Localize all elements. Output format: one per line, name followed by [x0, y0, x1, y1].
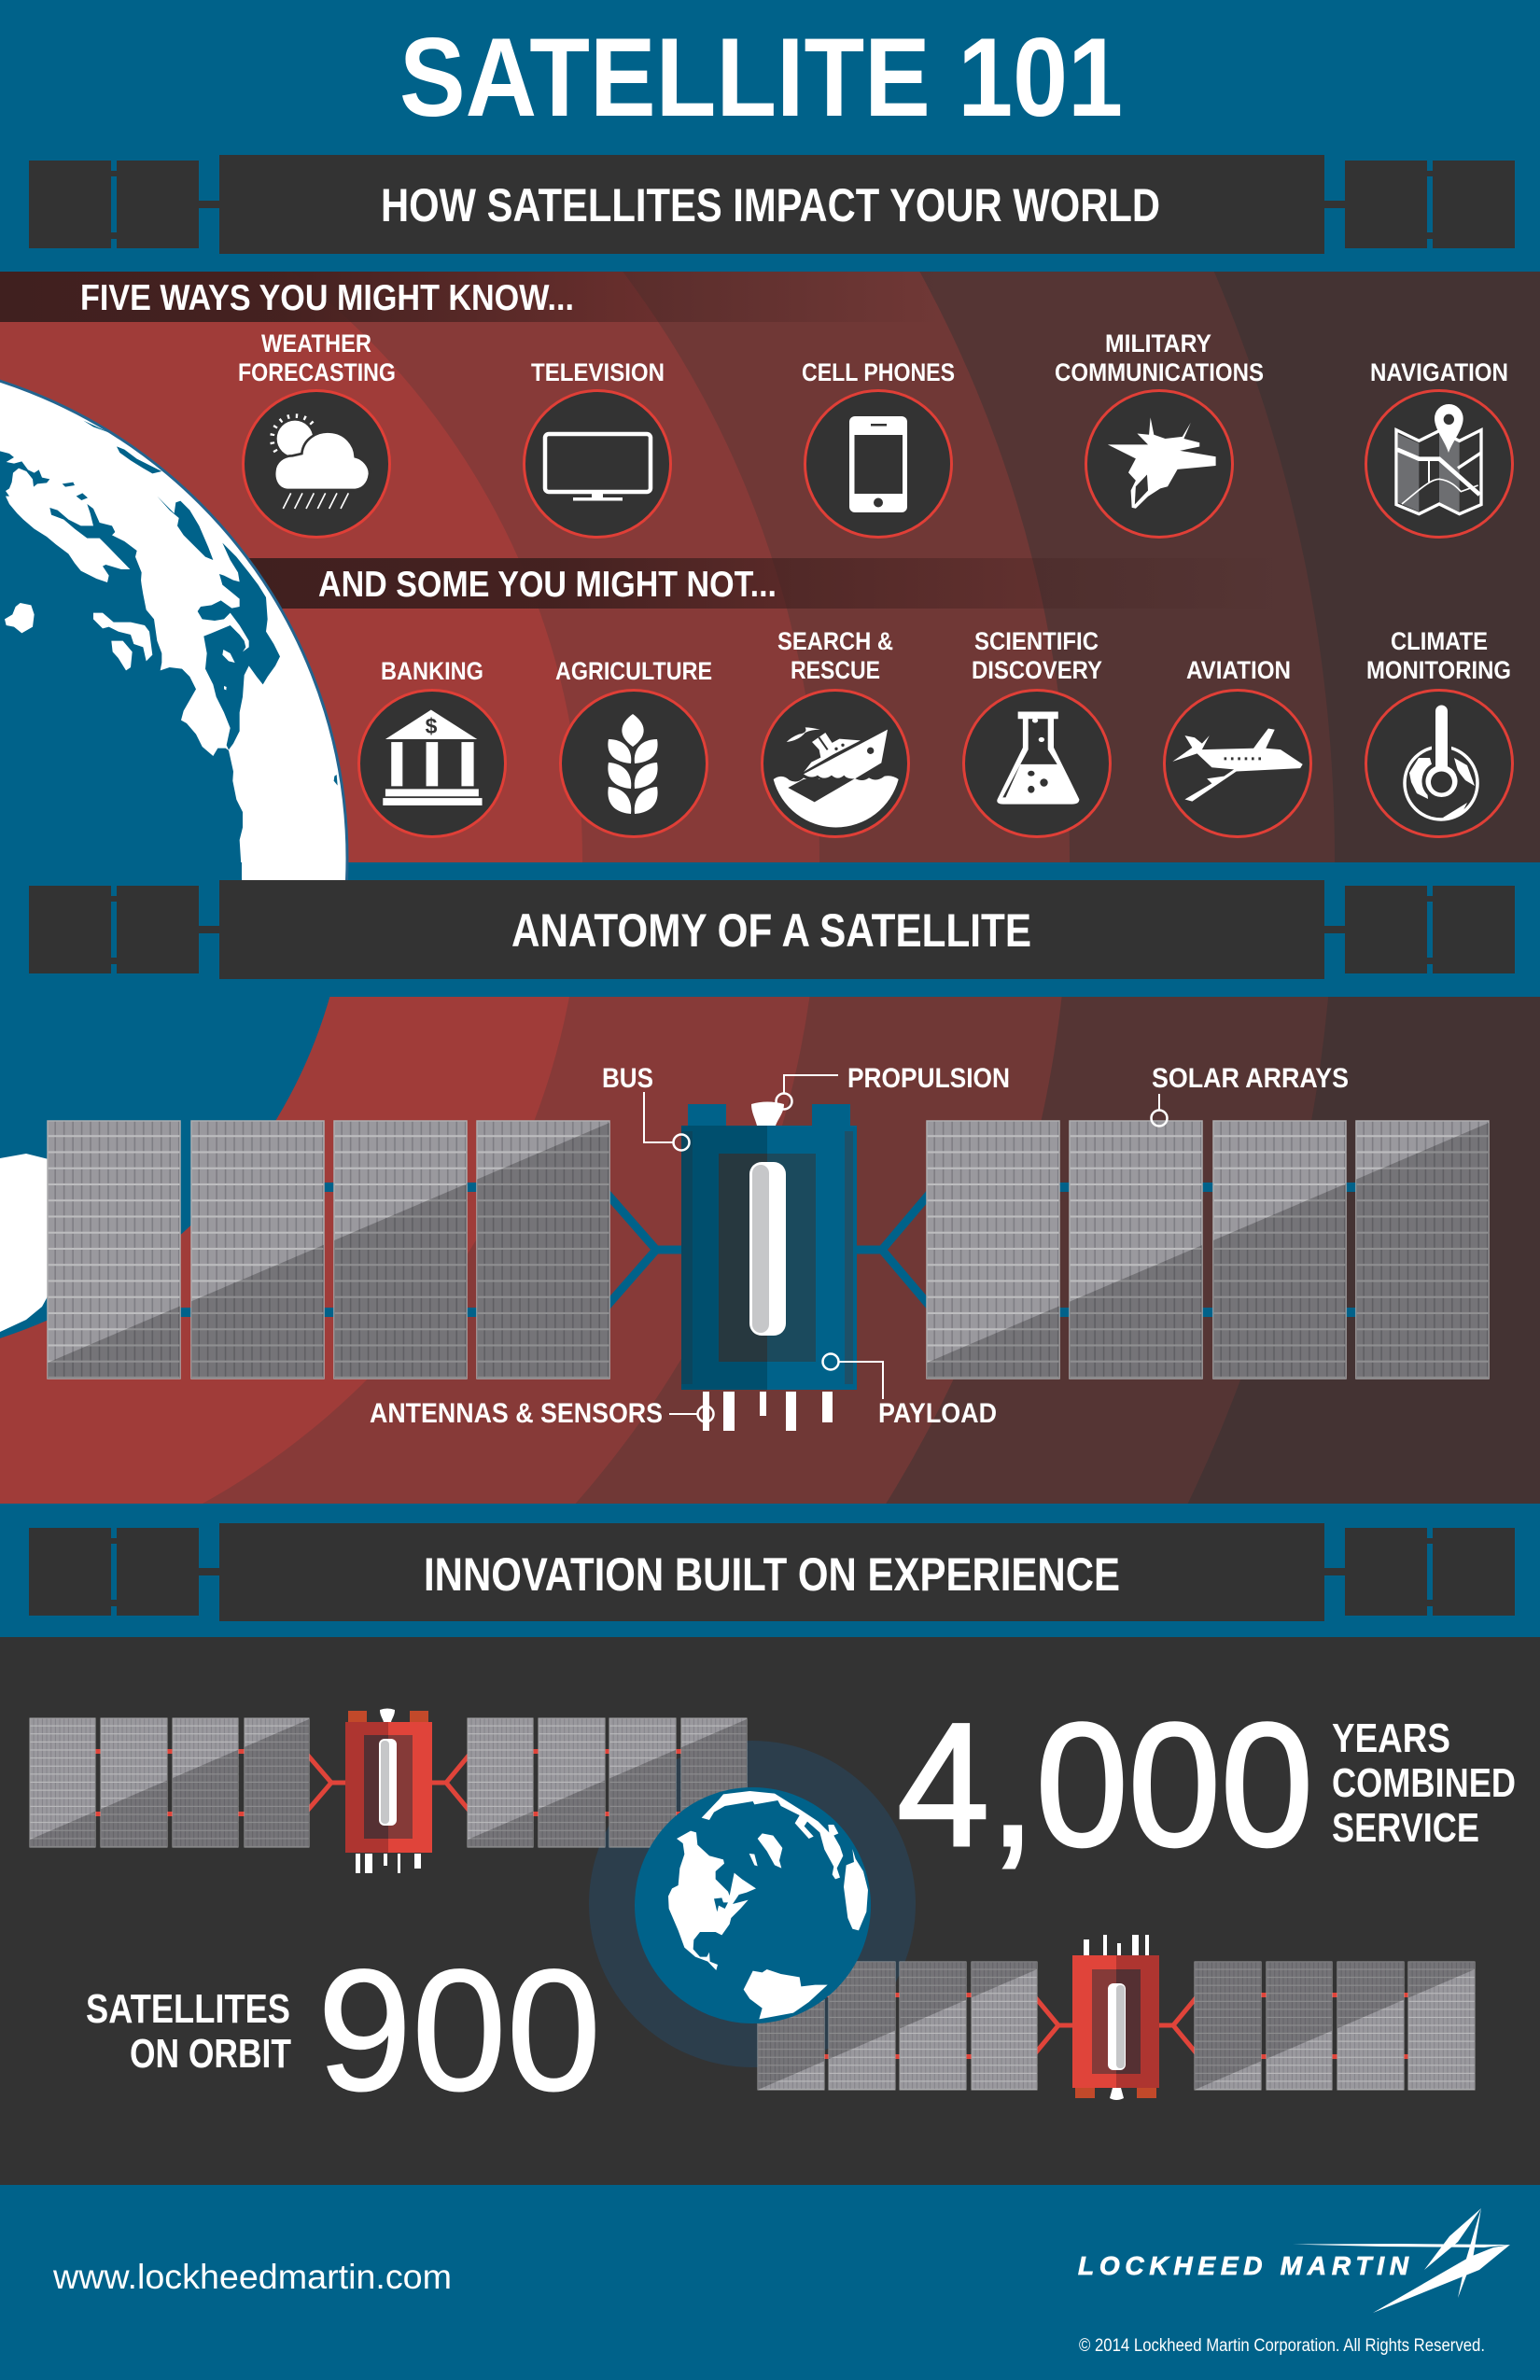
label: scientific discovery: DISCOVERY — [972, 656, 1102, 684]
label: cell phones: CELL PHONES — [802, 358, 955, 386]
footer url: www.lockheedmartin.com — [52, 2258, 452, 2296]
orbit halo — [589, 1741, 916, 2067]
callout: propulsion: PROPULSION — [847, 1063, 1010, 1094]
label: scientific discovery — [972, 627, 1102, 684]
icon: weather — [243, 390, 390, 538]
panel: anatomy background with earth edge — [0, 997, 1540, 1504]
label: weather forecasting: FORECASTING — [238, 358, 396, 386]
lockheed martin logo: LOCKHEED MARTIN — [1078, 2251, 1409, 2280]
solar arrays — [758, 1962, 1475, 2090]
callout: antennas and sensors: ANTENNAS & SENSORS — [370, 1398, 663, 1429]
label: banking: BANKING — [381, 657, 483, 685]
body — [1072, 1955, 1159, 2100]
band: five ways you might know: FIVE WAYS YOU MIGHT KNOW... — [80, 278, 574, 318]
icon: thermometer and globe — [1366, 691, 1512, 836]
stat: 900 satellites on orbit — [86, 1935, 601, 2127]
stat: 4,000 years combined service: 4,000 — [897, 1687, 1313, 1883]
label: weather forecasting: WEATHER — [261, 329, 371, 357]
solar arrays — [30, 1718, 747, 1847]
band: five ways you might know — [0, 272, 943, 322]
icon: flask — [963, 691, 1111, 836]
label: search and rescue — [777, 627, 893, 684]
banner: innovation built on experience — [29, 1523, 1515, 1621]
band behind innovation banner — [0, 1504, 1540, 1637]
antennas — [356, 1854, 421, 1873]
callout: bus — [602, 1063, 689, 1150]
label: search and rescue: SEARCH & — [777, 627, 893, 655]
label: military communications: COMMUNICATIONS — [1055, 358, 1264, 386]
band behind anatomy banner — [0, 880, 1540, 997]
earth: large globe — [0, 379, 349, 880]
label: military communications: MILITARY — [1105, 329, 1211, 357]
label: aviation: AVIATION — [1186, 656, 1291, 684]
lockheed martin logo — [1078, 2208, 1510, 2313]
africa — [844, 1849, 868, 1930]
band: and some you might not: AND SOME YOU MIGHT NOT... — [318, 565, 777, 605]
icon row: five ways you might know — [238, 329, 1512, 538]
arms — [1031, 1993, 1200, 2058]
stat: 4,000 years combined service: YEARS — [1332, 1715, 1450, 1761]
label: navigation: NAVIGATION — [1370, 358, 1508, 386]
panel: five ways background rings — [0, 272, 1540, 862]
label: military communications — [1055, 329, 1264, 386]
antennas — [703, 1392, 833, 1431]
blue band under section one — [0, 862, 242, 880]
callout: solar arrays — [1152, 1063, 1349, 1126]
icon: bank: $ — [426, 714, 438, 738]
panel: innovation dark background — [0, 1637, 1540, 2185]
icon row: and some you might not — [358, 627, 1512, 836]
label: climate monitoring — [1366, 627, 1511, 684]
label: scientific discovery: SCIENTIFIC — [974, 627, 1099, 655]
banner: how satellites impact your world — [29, 155, 1515, 254]
banner: anatomy of a satellite: ANATOMY OF A SATELLITE — [511, 904, 1031, 957]
stat: 900 satellites on orbit: SATELLITES — [86, 1986, 290, 2032]
earth: small globe — [635, 1787, 871, 2023]
callout: payload: PAYLOAD — [878, 1398, 997, 1429]
icon: fighter jet — [1086, 390, 1232, 538]
body — [345, 1708, 432, 1853]
title: SATELLITE 101 — [399, 15, 1123, 140]
callout: payload — [823, 1353, 997, 1429]
label: climate monitoring: CLIMATE — [1391, 627, 1488, 655]
callout: bus: BUS — [602, 1063, 653, 1094]
label: television: TELEVISION — [531, 358, 665, 386]
stat: 900 satellites on orbit: ON ORBIT — [130, 2031, 291, 2077]
callout: solar arrays: SOLAR ARRAYS — [1152, 1063, 1349, 1094]
banner: innovation built on experience: INNOVATION BUILT ON EXPERIENCE — [424, 1548, 1120, 1601]
icon: business jet — [1165, 691, 1310, 836]
stat: 900 satellites on orbit: 900 — [317, 1935, 601, 2127]
label: search and rescue: RESCUE — [791, 656, 880, 684]
banner: how satellites impact your world: HOW SATELLITES IMPACT YOUR WORLD — [381, 179, 1160, 231]
south america — [744, 1969, 828, 2019]
great lakes — [714, 1897, 728, 1911]
north america — [668, 1831, 756, 1970]
satellite: bottom right red — [758, 1935, 1475, 2100]
icon: television — [525, 390, 670, 538]
greenland — [758, 1833, 782, 1869]
arms — [303, 1750, 473, 1815]
callout: propulsion — [777, 1063, 1010, 1109]
icon: ship — [762, 691, 909, 836]
bus body — [681, 1101, 857, 1390]
band: and some you might not — [233, 558, 1283, 609]
label: agriculture: AGRICULTURE — [555, 657, 712, 685]
antennas — [1084, 1935, 1149, 1955]
satellite: top left red — [30, 1708, 747, 1873]
icon: wheat — [560, 691, 707, 836]
stat: 4,000 years combined service: SERVICE — [1332, 1805, 1479, 1851]
label: climate monitoring: MONITORING — [1366, 656, 1511, 684]
arctic islet — [749, 1854, 758, 1866]
label: weather forecasting — [238, 329, 396, 386]
icon: cell phone — [805, 390, 952, 538]
banner: anatomy of a satellite — [29, 880, 1515, 979]
icon: bank — [358, 691, 506, 836]
copyright: © 2014 Lockheed Martin Corporation. All Rights Reserved. — [1079, 2336, 1485, 2356]
icon: map — [1366, 390, 1512, 538]
satellite: anatomy diagram — [48, 1063, 1489, 1431]
northern land arc — [702, 1791, 843, 1879]
arms connecting arrays to bus — [597, 1183, 939, 1317]
solar arrays: left wing — [48, 1121, 609, 1379]
solar arrays: right wing — [927, 1121, 1489, 1379]
